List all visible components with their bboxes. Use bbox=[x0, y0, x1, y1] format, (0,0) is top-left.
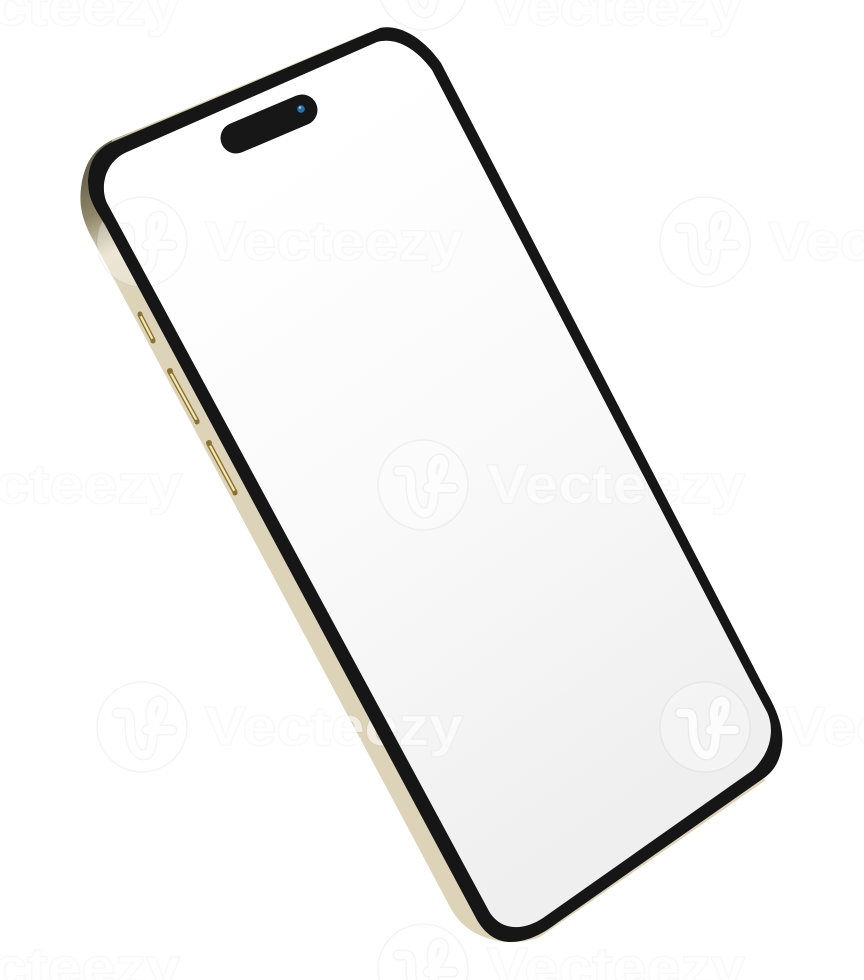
frame highlight: top edge bbox=[112, 33, 368, 141]
button: volume down bbox=[206, 440, 238, 496]
dynamic island bbox=[236, 103, 307, 138]
watermark logo bbox=[378, 924, 468, 980]
watermark logo bbox=[660, 682, 750, 772]
watermark row: upper: Vecteezy bbox=[205, 210, 463, 272]
button: action bbox=[138, 312, 156, 344]
side buttons bbox=[138, 312, 238, 496]
watermark logo bbox=[660, 197, 750, 287]
button: volume up bbox=[167, 368, 200, 424]
watermark logo bbox=[97, 197, 187, 287]
watermark row: lower: Vecteezy bbox=[205, 695, 463, 757]
watermark row: upper bbox=[97, 197, 864, 287]
watermark row: top bbox=[0, 0, 742, 37]
phone bezel: black ring around screen bbox=[88, 27, 782, 942]
camera lens bbox=[295, 103, 307, 115]
phone screen bbox=[88, 27, 782, 942]
watermark row: lower bbox=[97, 682, 864, 772]
watermark row: middle bbox=[0, 440, 745, 530]
watermark logo bbox=[378, 0, 468, 30]
watermark row: bottom bbox=[0, 924, 745, 980]
phone body: gold frame bbox=[80, 33, 766, 942]
watermark logo bbox=[378, 440, 468, 530]
watermark logo bbox=[97, 682, 187, 772]
watermark row: middle: Vecteezy bbox=[487, 453, 745, 515]
